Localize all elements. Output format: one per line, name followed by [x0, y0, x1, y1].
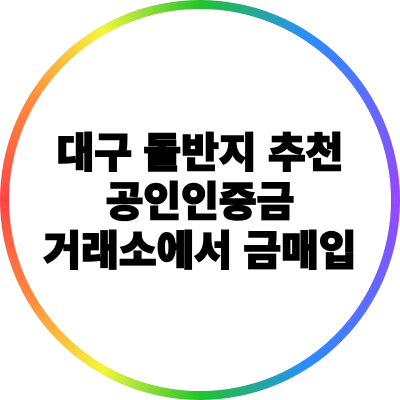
title line 1: 대구 돌반지 추천 — [57, 130, 343, 176]
title line 2: 공인인증금 — [106, 179, 294, 225]
title line 3: 거래소에서 금매입 — [43, 228, 357, 274]
